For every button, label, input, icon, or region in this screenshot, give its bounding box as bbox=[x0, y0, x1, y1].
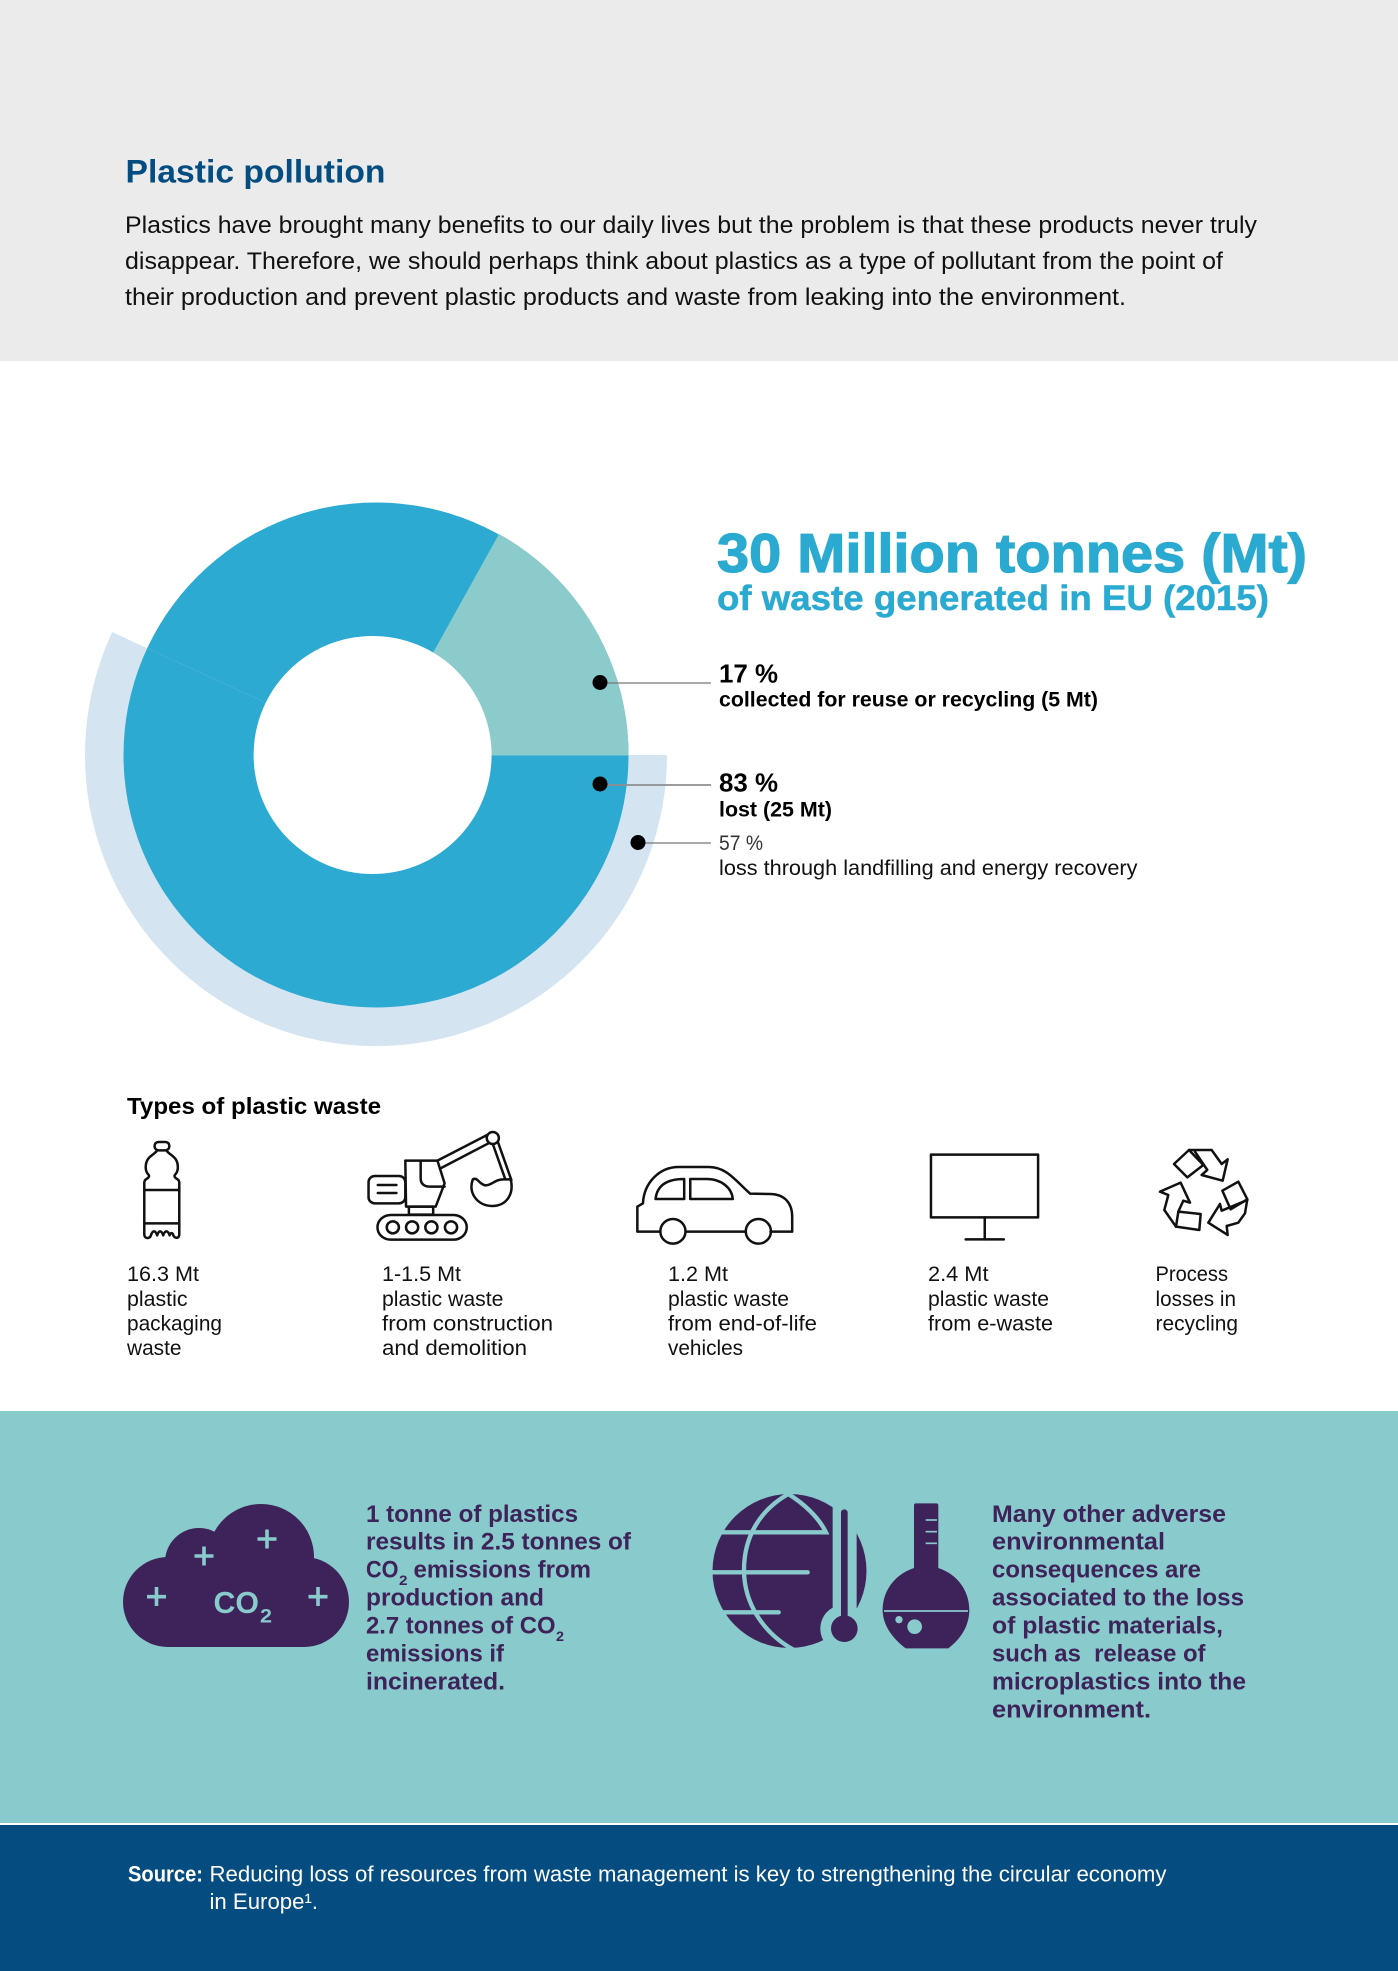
text block: CO2 emissions: CO bbox=[366, 1556, 398, 1584]
callout: 17 % collected: collected for reuse or recycling (5 Mt) bbox=[719, 688, 1098, 712]
text block: adverse consequences: environmental bbox=[992, 1528, 1165, 1556]
donut segment: 17 % collected bbox=[376, 534, 629, 756]
leader line: 57 % bbox=[630, 835, 711, 850]
headline: 30 million tonnes bbox=[717, 522, 1307, 618]
text block: CO2 emissions: 1 tonne of plastics bbox=[366, 1501, 578, 1528]
leader line: 17 % bbox=[592, 675, 711, 690]
headline: 30 million tonnes: of waste generated in EU (2015) bbox=[717, 579, 1269, 618]
icon: monitor bbox=[931, 1155, 1038, 1239]
source text: Source: bbox=[128, 1862, 203, 1886]
text block: adverse consequences: environment. bbox=[992, 1696, 1151, 1724]
text block: adverse consequences: such as release of bbox=[992, 1640, 1207, 1668]
source text bbox=[128, 1862, 1167, 1914]
callout: 17 % collected bbox=[719, 658, 1098, 712]
type: process losses bbox=[1156, 1262, 1238, 1336]
type: end-of-life vehicles: 1.2 Mt bbox=[668, 1262, 728, 1286]
icon: CO2 cloud: 2 bbox=[260, 1606, 272, 1628]
text block: CO2 emissions bbox=[366, 1501, 632, 1696]
type: end-of-life vehicles: plastic waste bbox=[668, 1287, 789, 1311]
type: packaging waste: waste bbox=[126, 1336, 182, 1360]
icon: recycling bbox=[1160, 1150, 1247, 1235]
type: packaging waste: packaging bbox=[127, 1312, 222, 1336]
source text: Reducing loss of resources from waste management is key to strengthening the circular economy bbox=[210, 1862, 1167, 1886]
headline: 30 million tonnes: 30 Million tonnes (Mt) bbox=[717, 522, 1307, 584]
icon: flask bbox=[883, 1503, 969, 1648]
text block: adverse consequences: Many other adverse bbox=[992, 1501, 1226, 1528]
callout: 83 % lost bbox=[719, 768, 832, 822]
source text: in Europe¹. bbox=[210, 1889, 318, 1914]
type: packaging waste bbox=[126, 1262, 222, 1360]
text block: CO2 emissions: 2 bbox=[399, 1572, 408, 1588]
type: process losses: losses in bbox=[1156, 1287, 1236, 1311]
type: end-of-life vehicles bbox=[668, 1262, 817, 1360]
type: construction and demolition: 1-1.5 Mt bbox=[382, 1262, 461, 1286]
type: e-waste: plastic waste bbox=[928, 1287, 1049, 1311]
type: e-waste bbox=[928, 1262, 1053, 1336]
donut chart bbox=[85, 502, 667, 1046]
callout: 57 % loss bbox=[719, 832, 1138, 880]
type: construction and demolition: plastic waste bbox=[382, 1287, 504, 1311]
icon: car bbox=[637, 1167, 792, 1244]
icon: globe with thermometer bbox=[710, 1490, 868, 1653]
outer ring: 57 % loss bbox=[85, 632, 667, 1046]
text block: CO2 emissions: incinerated. bbox=[366, 1668, 505, 1696]
text block: adverse consequences: consequences are bbox=[992, 1556, 1201, 1584]
type: packaging waste: plastic bbox=[127, 1287, 188, 1311]
callout: 17 % collected: 17 % bbox=[719, 658, 778, 688]
panel: header bbox=[0, 0, 1398, 361]
type: construction and demolition bbox=[382, 1262, 553, 1360]
text block: adverse consequences: of plastic materials, bbox=[992, 1612, 1223, 1640]
type: process losses: Process bbox=[1156, 1262, 1228, 1286]
type: packaging waste: 16.3 Mt bbox=[127, 1262, 199, 1286]
text block: CO2 emissions: emissions from bbox=[414, 1556, 591, 1584]
icon: bottle bbox=[144, 1142, 179, 1238]
callout: 83 % lost: 83 % bbox=[719, 768, 778, 798]
callout: 83 % lost: lost (25 Mt) bbox=[719, 798, 832, 822]
callout: 57 % loss: loss through landfilling and energy recovery bbox=[719, 857, 1138, 880]
text block: adverse consequences: associated to the loss bbox=[992, 1584, 1244, 1612]
type: process losses: recycling bbox=[1156, 1312, 1238, 1336]
text block: CO2 emissions: production and bbox=[366, 1584, 544, 1612]
text block: adverse consequences bbox=[992, 1501, 1246, 1724]
panel: consequences bbox=[0, 1411, 1398, 1823]
type: e-waste: from e-waste bbox=[928, 1312, 1053, 1336]
type: construction and demolition: and demolition bbox=[382, 1336, 527, 1360]
text block: CO2 emissions: 2 bbox=[556, 1628, 564, 1644]
callout: 57 % loss: 57 % bbox=[719, 832, 763, 855]
text block: intro: their production and prevent plastic products and waste from leaking into the environment. bbox=[125, 284, 1126, 311]
donut segment: 83 % lost bbox=[124, 502, 628, 1008]
icon: CO2 cloud: CO bbox=[214, 1585, 259, 1620]
type: construction and demolition: from construction bbox=[382, 1312, 553, 1336]
type: end-of-life vehicles: vehicles bbox=[668, 1336, 743, 1360]
panel: source footer bbox=[0, 1825, 1398, 1971]
text block: CO2 emissions: emissions if bbox=[366, 1640, 505, 1668]
heading: types of plastic waste: Types of plastic waste bbox=[127, 1093, 381, 1119]
type: end-of-life vehicles: from end-of-life bbox=[668, 1312, 817, 1336]
icon: CO2 cloud bbox=[123, 1504, 349, 1647]
heading: plastic pollution: Plastic pollution bbox=[126, 154, 386, 190]
text block: intro bbox=[125, 212, 1257, 311]
text block: adverse consequences: microplastics into the bbox=[992, 1668, 1246, 1696]
type: e-waste: 2.4 Mt bbox=[928, 1262, 989, 1286]
text block: CO2 emissions: results in 2.5 tonnes of bbox=[366, 1528, 632, 1556]
text block: intro: Plastics have brought many benefits to our daily lives but the problem is that these products never truly bbox=[125, 212, 1257, 239]
text block: intro: disappear. Therefore, we should perhaps think about plastics as a type of pollutant from the point of bbox=[125, 248, 1223, 275]
icon: excavator bbox=[369, 1132, 512, 1240]
leader line: 83 % bbox=[592, 776, 711, 792]
text block: CO2 emissions: 2.7 tonnes of CO bbox=[366, 1612, 556, 1640]
